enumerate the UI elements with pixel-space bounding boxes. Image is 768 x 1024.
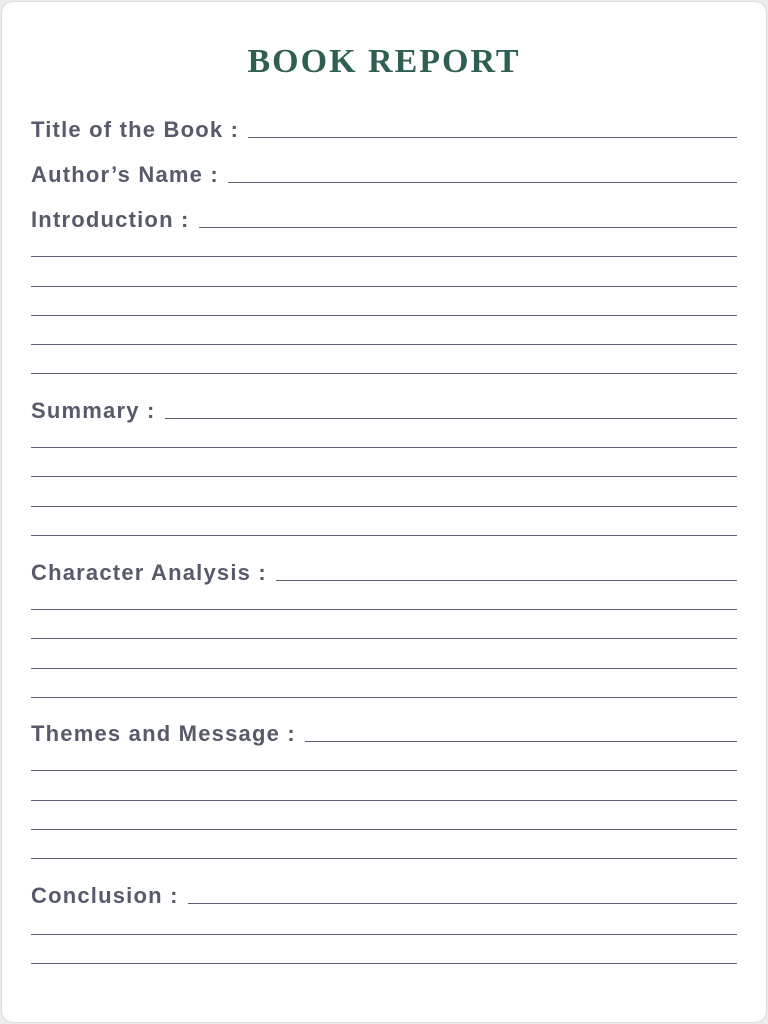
section: themes and message: Themes and Message :	[31, 721, 296, 746]
section: themes and message	[31, 721, 737, 746]
title: BOOK REPORT	[248, 43, 520, 80]
themes lines	[31, 770, 737, 859]
summary lines	[31, 447, 737, 536]
section: character analysis: Character Analysis :	[31, 560, 267, 585]
field: author's name	[31, 162, 737, 187]
section: introduction	[31, 207, 737, 232]
section: introduction: Introduction :	[31, 207, 190, 232]
section: summary: Summary :	[31, 398, 156, 423]
introduction lines	[31, 256, 737, 374]
character analysis lines	[31, 609, 737, 698]
field: title of the book: Title of the Book :	[31, 117, 239, 142]
field: author's name: Author’s Name :	[31, 162, 219, 187]
section: summary	[31, 398, 737, 423]
conclusion lines	[31, 934, 737, 964]
field: title of the book	[31, 117, 737, 142]
section: conclusion: Conclusion :	[31, 883, 179, 908]
section: character analysis	[31, 560, 737, 585]
section: conclusion	[31, 883, 737, 908]
